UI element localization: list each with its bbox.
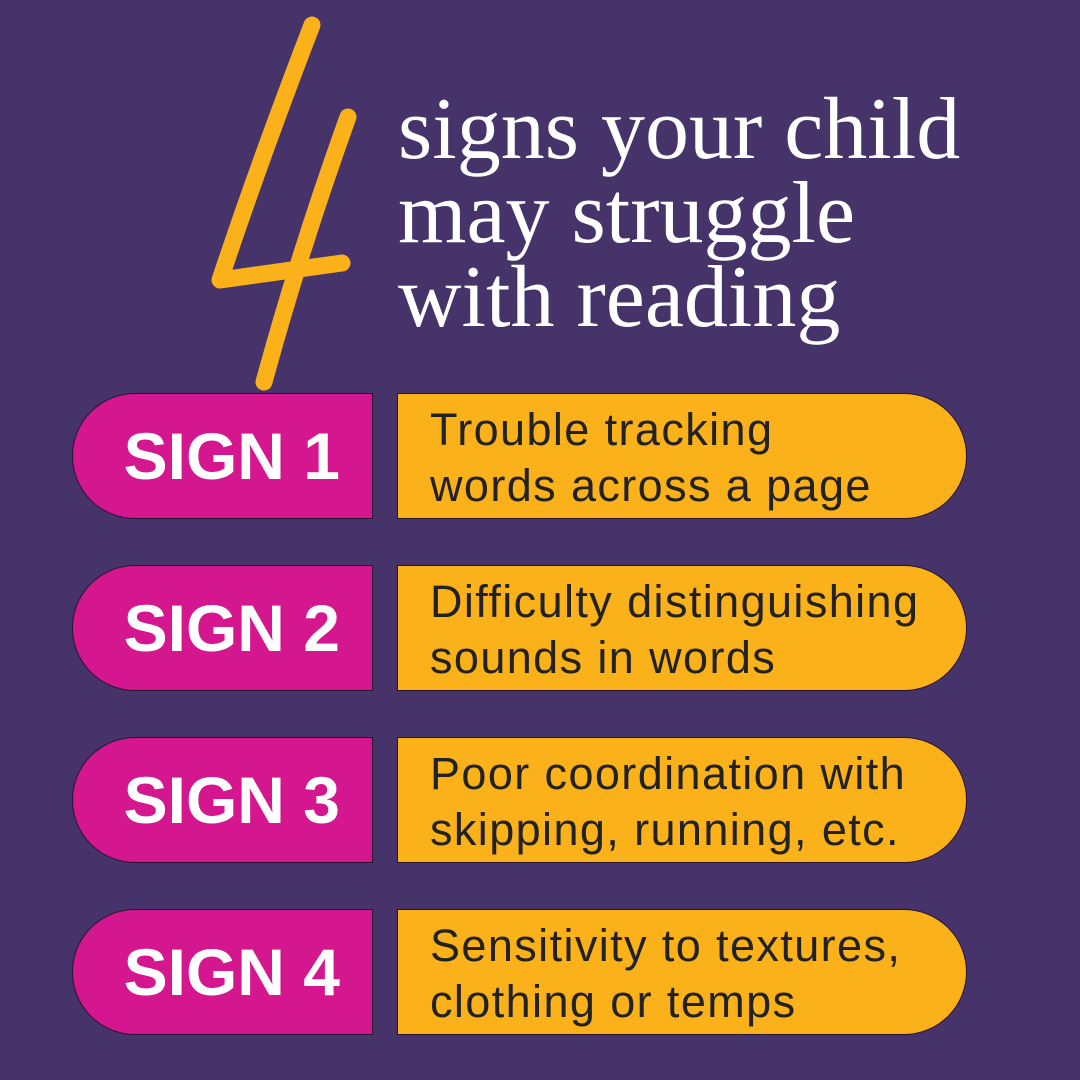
title: with reading bbox=[398, 249, 840, 346]
sign 2 bbox=[72, 565, 967, 691]
sign 3: Poor coordination with bbox=[430, 748, 906, 799]
sign 1: words across a page bbox=[430, 460, 872, 511]
sign 1: SIGN 1 bbox=[124, 419, 340, 493]
sign 1: Trouble tracking bbox=[430, 404, 773, 455]
sign 4: Sensitivity to textures, bbox=[430, 920, 901, 971]
sign 3: SIGN 3 bbox=[124, 763, 340, 837]
sign 2: Difficulty distinguishing bbox=[430, 576, 919, 627]
sign 1 bbox=[72, 393, 967, 519]
sign 3 bbox=[72, 737, 967, 863]
sign 4 bbox=[72, 909, 967, 1035]
title: may struggle bbox=[398, 165, 855, 262]
sign 3: skipping, running, etc. bbox=[430, 804, 900, 855]
sign 2: sounds in words bbox=[430, 632, 776, 683]
sign 4: clothing or temps bbox=[430, 976, 796, 1027]
title: signs your child bbox=[398, 81, 960, 178]
sign 2: SIGN 2 bbox=[124, 591, 340, 665]
sign 4: SIGN 4 bbox=[124, 935, 340, 1009]
title bbox=[398, 81, 960, 346]
big number 4 bbox=[212, 16, 356, 390]
